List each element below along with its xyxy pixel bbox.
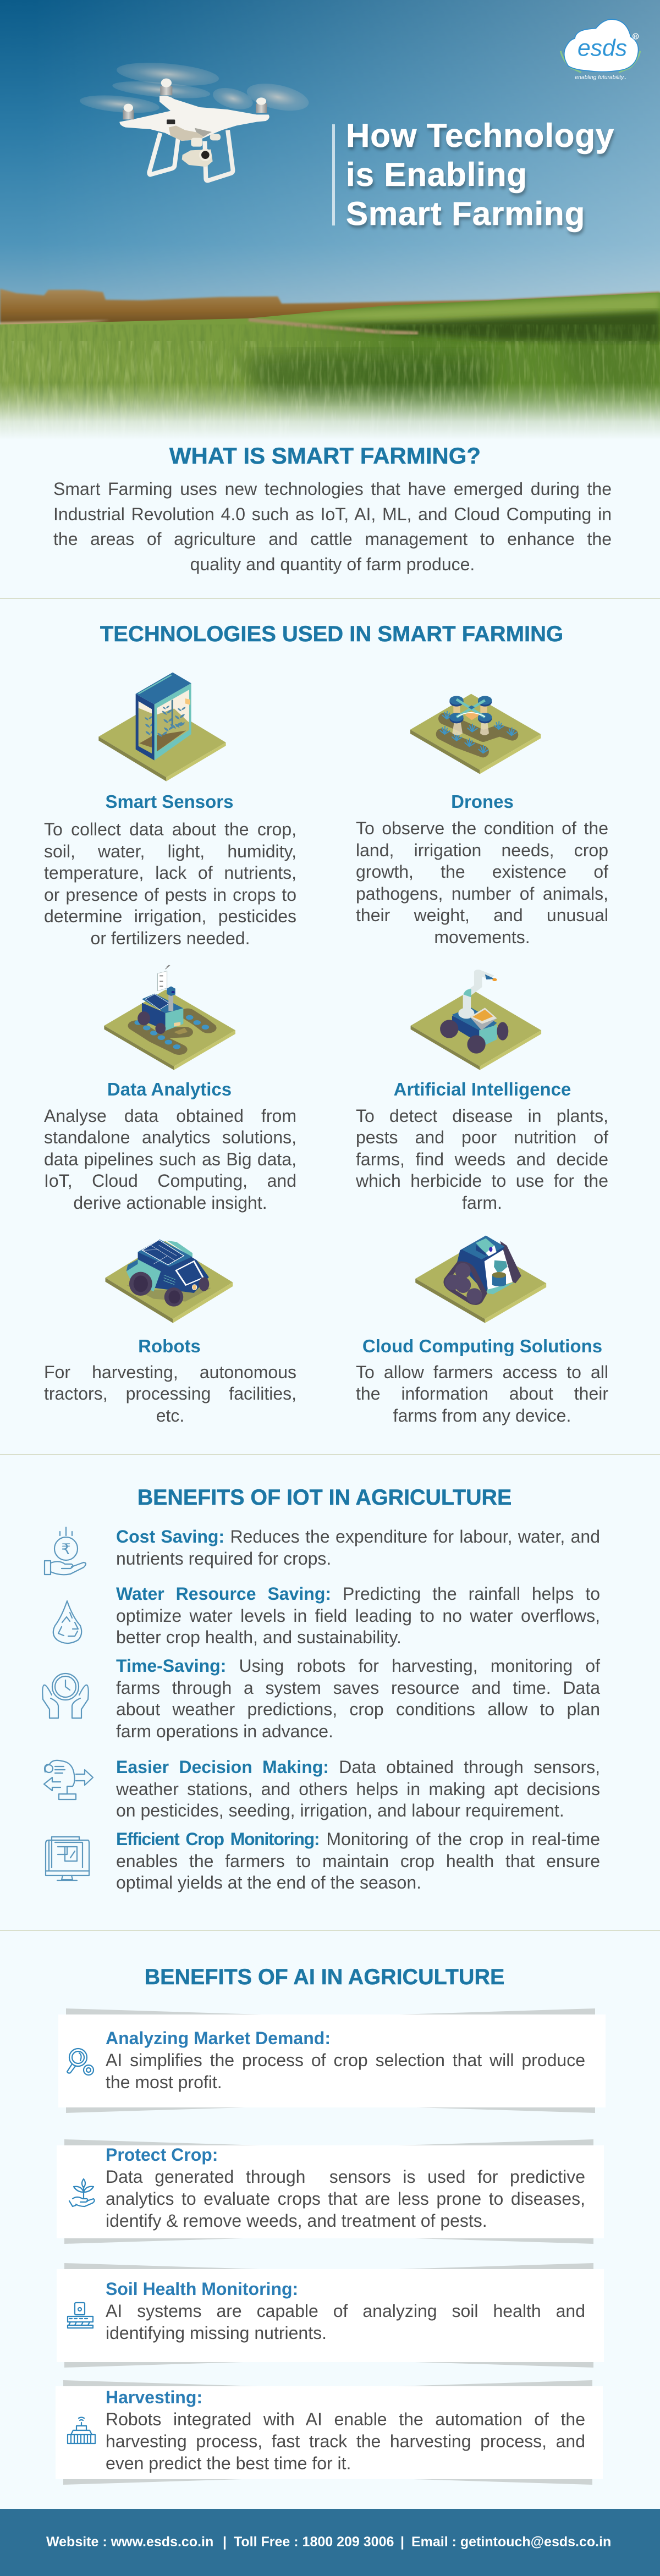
text: harvesting: Robots integrated with AI enable the automation of the xyxy=(106,2409,585,2429)
text: smart sensors xyxy=(44,819,296,948)
text: smart sensors: To collect data about the crop, xyxy=(44,819,296,839)
text: artificial intelligence: farm. xyxy=(462,1193,502,1213)
icon: soil sensor xyxy=(67,2302,94,2329)
icon: robot tractor xyxy=(106,1239,233,1323)
heading: benefits of IoT: BENEFITS OF IOT IN AGRICULTURE xyxy=(138,1485,512,1510)
text: cost saving xyxy=(116,1527,600,1568)
text: cloud computing solutions: farms from any device. xyxy=(393,1406,571,1425)
footer: | xyxy=(223,2534,227,2550)
text: data analytics: Analyse data obtained from xyxy=(44,1106,296,1126)
text: harvesting: harvesting process, fast track the harvesting process, and xyxy=(106,2431,585,2451)
panel: harvesting xyxy=(56,2380,603,2485)
title: is Enabling xyxy=(346,156,527,193)
footer: Toll Free : 1800 209 3006 xyxy=(234,2534,394,2550)
text: decision making: weather stations, and others helps in making apt decisions xyxy=(116,1779,600,1799)
text: artificial intelligence: To detect disease in plants, xyxy=(356,1106,608,1126)
title: Smart Farming xyxy=(346,195,585,232)
text: harvesting: even predict the best time for it. xyxy=(106,2453,351,2473)
label: robots: Robots xyxy=(138,1336,201,1356)
icon: hand with sprout xyxy=(68,2178,95,2208)
text: smart sensors: soil, water, light, humidity, xyxy=(44,841,296,861)
text: water resource: better crop health, and sustainability. xyxy=(116,1627,402,1647)
heading: benefits of AI: BENEFITS OF AI IN AGRICULTURE xyxy=(145,1965,504,1989)
text: smart sensors: determine irrigation, pesticides xyxy=(44,906,296,926)
icon: time saving xyxy=(42,1673,89,1719)
logo: esds: enabling futurability.. xyxy=(575,74,626,80)
text: cloud computing solutions xyxy=(356,1362,608,1425)
text: artificial intelligence xyxy=(356,1106,608,1213)
footer: Email : getintouch@esds.co.in xyxy=(411,2534,611,2550)
text: artificial intelligence: farms, find weeds and decide xyxy=(356,1149,608,1169)
label: drones: Drones xyxy=(451,791,514,812)
panel: soil health monitoring xyxy=(57,2263,604,2368)
title bar xyxy=(332,124,335,225)
text block: intro: the areas of agriculture and cattle management to enhance the xyxy=(53,529,612,549)
text: drones: pathogens, number of animals, xyxy=(356,884,608,904)
text: drones xyxy=(356,818,608,947)
icon: crop monitoring xyxy=(45,1836,90,1881)
text: data analytics: standalone analytics solutions, xyxy=(44,1127,296,1147)
icons row: robots and cloud computing xyxy=(106,1235,547,1323)
text: protect crop: Protect Crop: xyxy=(106,2145,218,2165)
icon: smart sensors greenhouse xyxy=(98,672,226,781)
text: harvesting xyxy=(106,2387,585,2473)
text: time saving: farms through a system saves resource and time. Data xyxy=(116,1678,600,1698)
text: harvesting: Harvesting: xyxy=(106,2387,202,2407)
text: cloud computing solutions: the information about their xyxy=(356,1384,608,1403)
icon: magnifier and gear xyxy=(66,2048,95,2076)
icon: water resource xyxy=(53,1600,82,1644)
text: crop monitoring: Efficient Crop Monitoring: Monitoring of the crop in real‑time xyxy=(116,1829,600,1849)
logo: esds xyxy=(560,19,640,80)
text block: intro: Smart Farming uses new technologies that have emerged during the xyxy=(53,479,612,499)
text: drones: their weight, and unusual xyxy=(356,905,608,925)
footer: | xyxy=(400,2534,404,2550)
text: data analytics xyxy=(44,1106,296,1213)
text: water resource: optimize water levels in field leading to no water overflows, xyxy=(116,1606,600,1626)
label: smart sensors: Smart Sensors xyxy=(106,791,233,812)
text: protect crop xyxy=(106,2145,585,2231)
label: artificial intelligence: Artificial Intelligence xyxy=(394,1079,571,1099)
grass field xyxy=(0,291,660,440)
text: smart sensors: or fertilizers needed. xyxy=(91,928,250,948)
footer: Website : www.esds.co.in xyxy=(46,2534,213,2550)
text: data analytics: derive actionable insight. xyxy=(73,1193,267,1213)
text: cost saving: Cost Saving: Reduces the expenditure for labour, water, and xyxy=(116,1527,600,1546)
panel: analyzing market demand xyxy=(58,2008,606,2113)
text: soil health monitoring xyxy=(106,2279,585,2343)
text: drones: To observe the condition of the xyxy=(356,818,608,838)
text: time saving xyxy=(116,1656,601,1741)
text: artificial intelligence: which herbicide to use for the xyxy=(356,1171,608,1191)
text: protect crop: Data generated through sensors is used for predictive xyxy=(106,2167,585,2187)
hero photo: drone over a green field xyxy=(0,0,660,437)
text: drones: growth, the existence of xyxy=(356,862,608,882)
text: protect crop: identify & remove weeds, and treatment of pests. xyxy=(106,2211,487,2231)
heading: what is smart farming: WHAT IS SMART FARMING? xyxy=(169,443,481,469)
text: time saving: Time-Saving: Using robots for harvesting, monitoring of xyxy=(116,1656,600,1676)
text: robots: tractors, processing facilities, xyxy=(44,1384,296,1403)
text: time saving: farm operations in advance. xyxy=(116,1721,333,1741)
logo: esds: R xyxy=(634,34,637,39)
text: soil health monitoring: AI systems are capable of analyzing soil health and xyxy=(106,2301,585,2321)
text: cost saving: nutrients required for crops. xyxy=(116,1549,331,1568)
text: analyzing market demand: the most profit. xyxy=(106,2072,222,2092)
label: cloud computing solutions: Cloud Computing Solutions xyxy=(362,1336,602,1356)
icons row: data analytics and AI xyxy=(104,965,541,1070)
text: crop monitoring xyxy=(116,1829,600,1892)
footer xyxy=(0,2509,660,2576)
text: soil health monitoring: identifying missing nutrients. xyxy=(106,2323,327,2343)
text: cloud computing solutions: To allow farmers access to all xyxy=(356,1362,608,1382)
icon: cost saving xyxy=(44,1527,87,1575)
text: decision making xyxy=(116,1757,600,1820)
tree line xyxy=(0,289,660,335)
text: robots xyxy=(44,1362,296,1425)
text: crop monitoring: optimal yields at the end of the season. xyxy=(116,1873,421,1892)
text: analyzing market demand xyxy=(106,2028,585,2092)
text: robots: etc. xyxy=(156,1406,184,1425)
text: data analytics: data pipelines such as Big data, xyxy=(44,1149,296,1169)
logo: esds: esds xyxy=(578,35,627,62)
text: smart sensors: temperature, lack of nutrients, xyxy=(44,863,296,883)
icon: cloud computing tracked robot xyxy=(415,1236,546,1323)
icon: cost saving: ₹ xyxy=(61,1541,71,1557)
icon: drones plot xyxy=(410,694,541,774)
text: analyzing market demand: AI simplifies the process of crop selection that will produce xyxy=(106,2050,585,2070)
heading: technologies: TECHNOLOGIES USED IN SMART FARMING xyxy=(100,622,563,646)
text: decision making: Easier Decision Making: Data obtained through sensors, xyxy=(116,1757,600,1777)
text: time saving: about weather predictions, crop conditions allow to plan xyxy=(116,1699,600,1719)
title xyxy=(346,117,616,236)
text: decision making: on pesticides, seeding, irrigation, and labour requirement. xyxy=(116,1801,564,1820)
text block: intro xyxy=(53,479,612,574)
white fade xyxy=(0,383,660,440)
text block: intro: quality and quantity of farm produce. xyxy=(190,554,475,574)
text: robots: For harvesting, autonomous xyxy=(44,1362,296,1382)
icon: AI robot arm xyxy=(411,972,541,1070)
drone xyxy=(79,59,311,181)
icon: harvesting machine xyxy=(67,2417,96,2444)
text: smart sensors: or presence of pests in crops to xyxy=(44,885,296,905)
text: water resource: Water Resource Saving: Predicting the rainfall helps to xyxy=(116,1584,600,1604)
text block: intro: Industrial Revolution 4.0 such as IoT, AI, ML, and Cloud Computing in xyxy=(53,504,612,524)
text: analyzing market demand: Analyzing Market Demand: xyxy=(106,2028,331,2048)
text: drones: movements. xyxy=(434,927,530,947)
label: data analytics: Data Analytics xyxy=(107,1079,232,1099)
text: crop monitoring: enables the farmers to maintain crop health that ensure xyxy=(116,1851,600,1871)
text: protect crop: analytics to evaluate crops that are less prone to diseases, xyxy=(106,2189,585,2209)
panel: protect crop xyxy=(57,2139,604,2244)
sky xyxy=(0,0,660,330)
text: artificial intelligence: pests and poor nutrition of xyxy=(356,1127,608,1147)
icon: data analytics rover xyxy=(104,965,235,1070)
icon: decision making xyxy=(43,1760,94,1801)
title: How Technology xyxy=(346,117,614,154)
text: water resource xyxy=(116,1584,600,1647)
text: data analytics: IoT, Cloud Computing, and xyxy=(44,1171,296,1191)
text: drones: land, irrigation needs, crop xyxy=(356,840,608,860)
text: soil health monitoring: Soil Health Monitoring: xyxy=(106,2279,298,2299)
